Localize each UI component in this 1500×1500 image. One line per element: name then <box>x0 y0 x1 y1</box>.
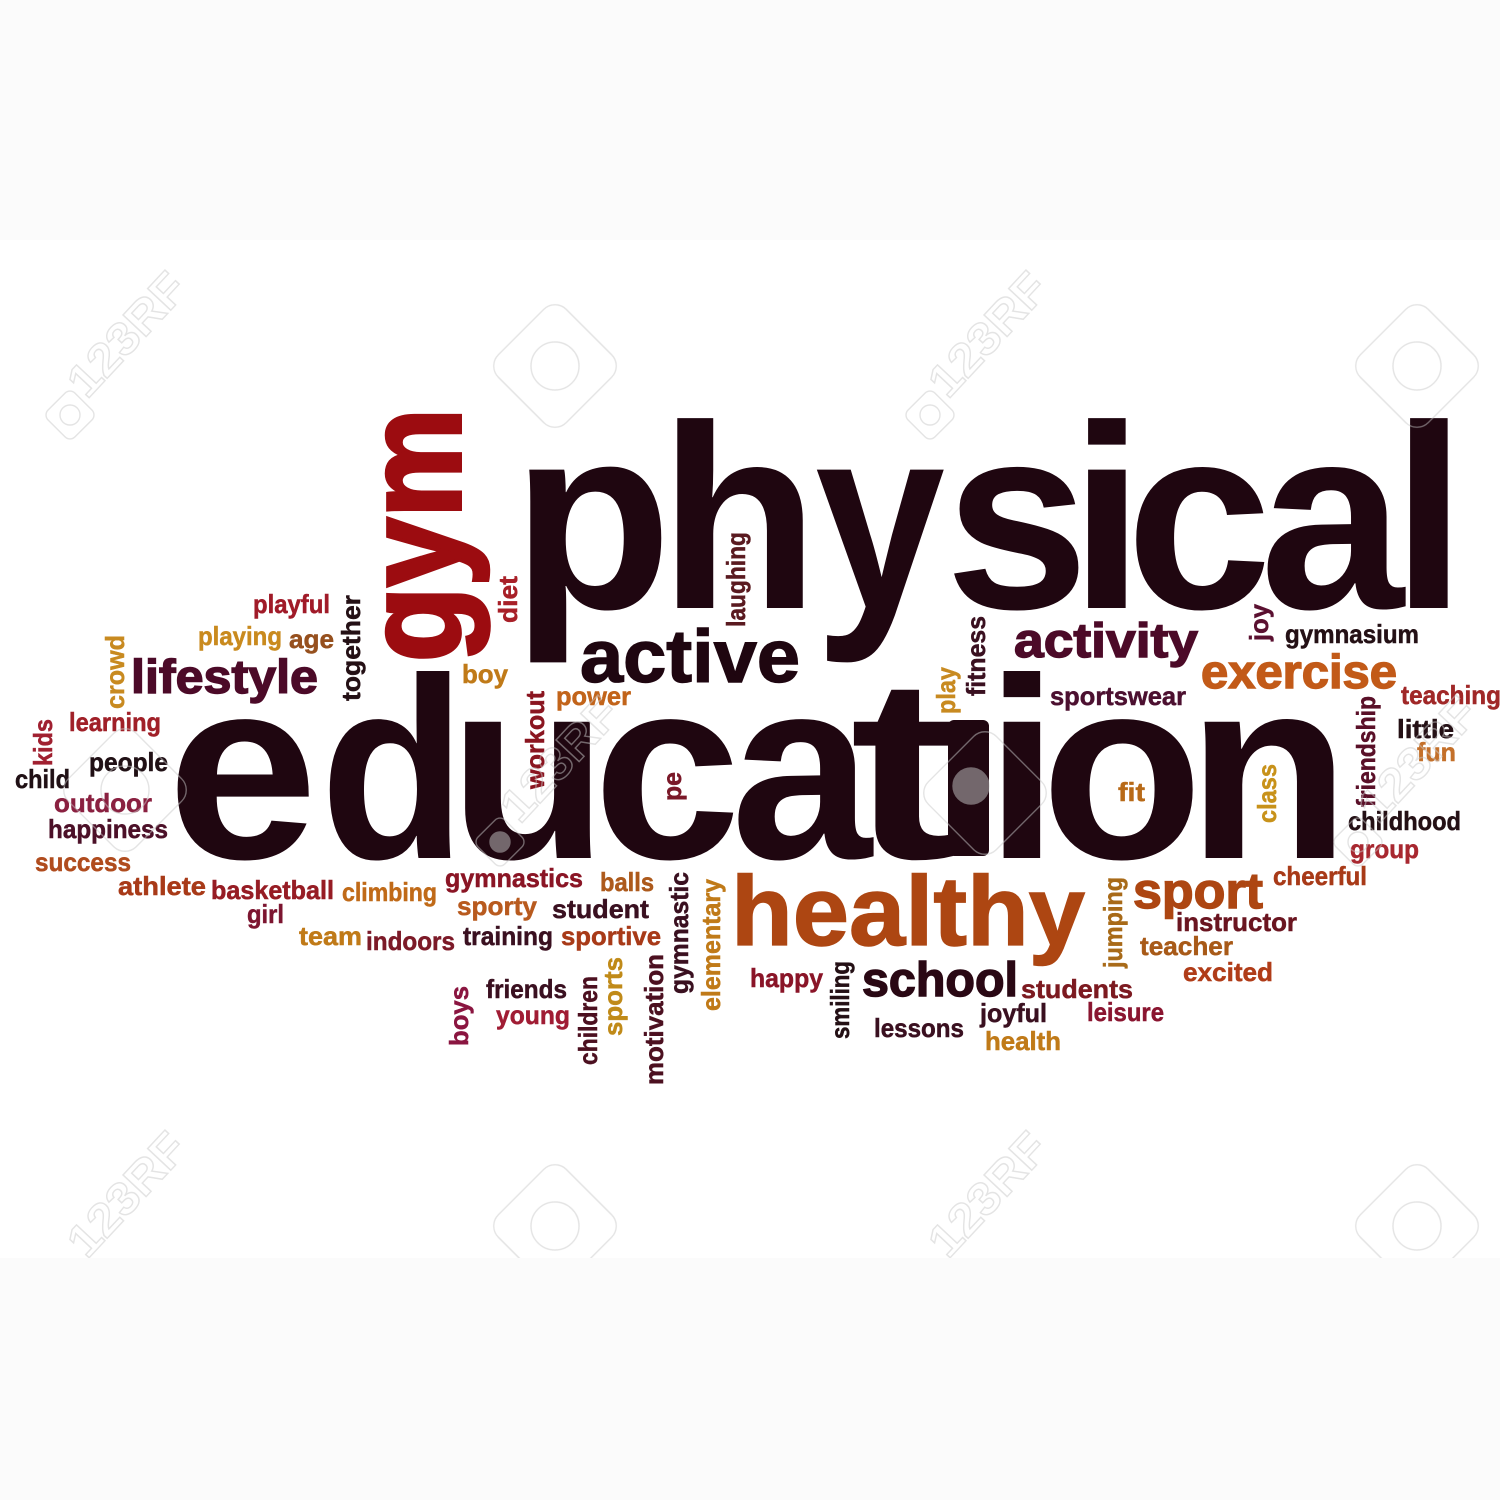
word: pe: pe <box>657 772 687 801</box>
word: education: u <box>449 624 608 913</box>
word: gymnastic: gymnastic <box>664 872 694 994</box>
word: workout: workout <box>520 691 550 790</box>
word: little: little <box>1397 714 1454 744</box>
word: basketball: basketball <box>211 875 334 905</box>
word: friends: friends <box>486 974 567 1004</box>
word: outdoor: outdoor <box>54 788 152 818</box>
word: boy: boy <box>462 659 509 689</box>
word: joyful: joyful <box>979 998 1047 1028</box>
word: climbing: climbing <box>342 877 437 907</box>
word: activity: activity <box>1014 615 1198 668</box>
word: active: active <box>580 615 800 698</box>
word: teacher: teacher <box>1140 931 1233 961</box>
watermarks <box>43 262 1488 1294</box>
word: together: together <box>336 595 366 701</box>
word: play: play <box>931 667 961 714</box>
word: leisure: leisure <box>1087 997 1164 1027</box>
word: happiness: happiness <box>48 814 168 844</box>
word: lifestyle: lifestyle <box>131 650 318 703</box>
word: gymnasium: gymnasium <box>1285 619 1419 649</box>
word: young: young <box>496 1000 570 1030</box>
word: education: t <box>850 624 957 913</box>
word: athlete: athlete <box>118 871 206 901</box>
word: jumping: jumping <box>1098 877 1128 969</box>
watermarks: 123RF <box>1347 687 1488 832</box>
word: cheerful: cheerful <box>1273 861 1367 891</box>
word: education: a <box>731 624 874 913</box>
word: people: people <box>89 747 168 777</box>
word: sportswear: sportswear <box>1050 681 1186 711</box>
word: friendship: friendship <box>1351 696 1381 807</box>
word: children: children <box>573 976 603 1065</box>
word: students: students <box>1021 974 1133 1004</box>
word: kids: kids <box>28 719 58 766</box>
word: joy: joy <box>1244 603 1274 642</box>
word: sport: sport <box>1133 863 1263 919</box>
word: childhood: childhood <box>1348 806 1461 836</box>
word: happy: happy <box>750 963 824 993</box>
word: class: class <box>1252 764 1282 823</box>
word: education: o <box>1041 624 1203 913</box>
word: child: child <box>15 764 70 794</box>
word: health: health <box>985 1026 1061 1056</box>
word cloud <box>15 371 1500 1085</box>
word: excited: excited <box>1183 957 1273 987</box>
word: gymnastics: gymnastics <box>445 863 583 893</box>
watermarks: 123RF <box>489 687 630 832</box>
word: smiling: smiling <box>825 961 855 1039</box>
word: balls: balls <box>600 867 654 897</box>
word: training: training <box>463 921 553 951</box>
word: success: success <box>35 847 131 877</box>
word: healthy: healthy <box>731 856 1085 966</box>
word: physical: l <box>1391 371 1467 664</box>
word: exercise: exercise <box>1201 645 1397 698</box>
word: elementary: elementary <box>696 878 726 1011</box>
word: physical: p <box>512 371 672 665</box>
word: physical: i <box>1069 371 1145 664</box>
word: education: n <box>1187 624 1350 913</box>
word: education: e <box>167 624 318 913</box>
background bottom band <box>0 1258 1500 1500</box>
word: education: d <box>320 624 466 913</box>
word: school: school <box>862 954 1018 1007</box>
word: sports: sports <box>598 957 628 1036</box>
word: laughing: laughing <box>721 532 751 627</box>
background top band <box>0 0 1500 240</box>
word: power: power <box>556 681 631 711</box>
watermarks: 123RF <box>917 1122 1058 1267</box>
watermarks: 123RF <box>56 1122 197 1267</box>
word: playful: playful <box>253 589 330 619</box>
word: age: age <box>289 624 334 654</box>
word: gym: gym <box>337 408 489 662</box>
word: student: student <box>552 894 649 924</box>
watermarks: 123RF <box>56 262 197 407</box>
word: fit: fit <box>1118 777 1145 807</box>
word: fun: fun <box>1417 737 1456 767</box>
word: playing: playing <box>198 621 282 651</box>
word: group: group <box>1350 834 1419 864</box>
word: team: team <box>299 921 362 951</box>
word: physical: a <box>1260 371 1406 664</box>
word: education: c <box>593 624 741 913</box>
word: motivation: motivation <box>639 954 669 1085</box>
word: physical: y <box>815 371 946 665</box>
word: indoors: indoors <box>366 926 455 956</box>
word: sportive: sportive <box>561 921 661 951</box>
word: instructor: instructor <box>1176 907 1297 937</box>
word: physical: c <box>1126 371 1272 664</box>
watermarks: 123RF <box>917 262 1058 407</box>
word: lessons: lessons <box>874 1013 964 1043</box>
word: physical: h <box>659 371 819 664</box>
word: education: i <box>985 624 1059 913</box>
word: physical: s <box>945 371 1089 664</box>
word: girl: girl <box>247 899 284 929</box>
word: learning: learning <box>69 707 161 737</box>
word: boys: boys <box>444 986 474 1046</box>
word: crowd: crowd <box>100 635 130 709</box>
word: fitness: fitness <box>961 616 991 696</box>
word: sporty: sporty <box>457 891 538 921</box>
word: diet: diet <box>493 576 523 623</box>
